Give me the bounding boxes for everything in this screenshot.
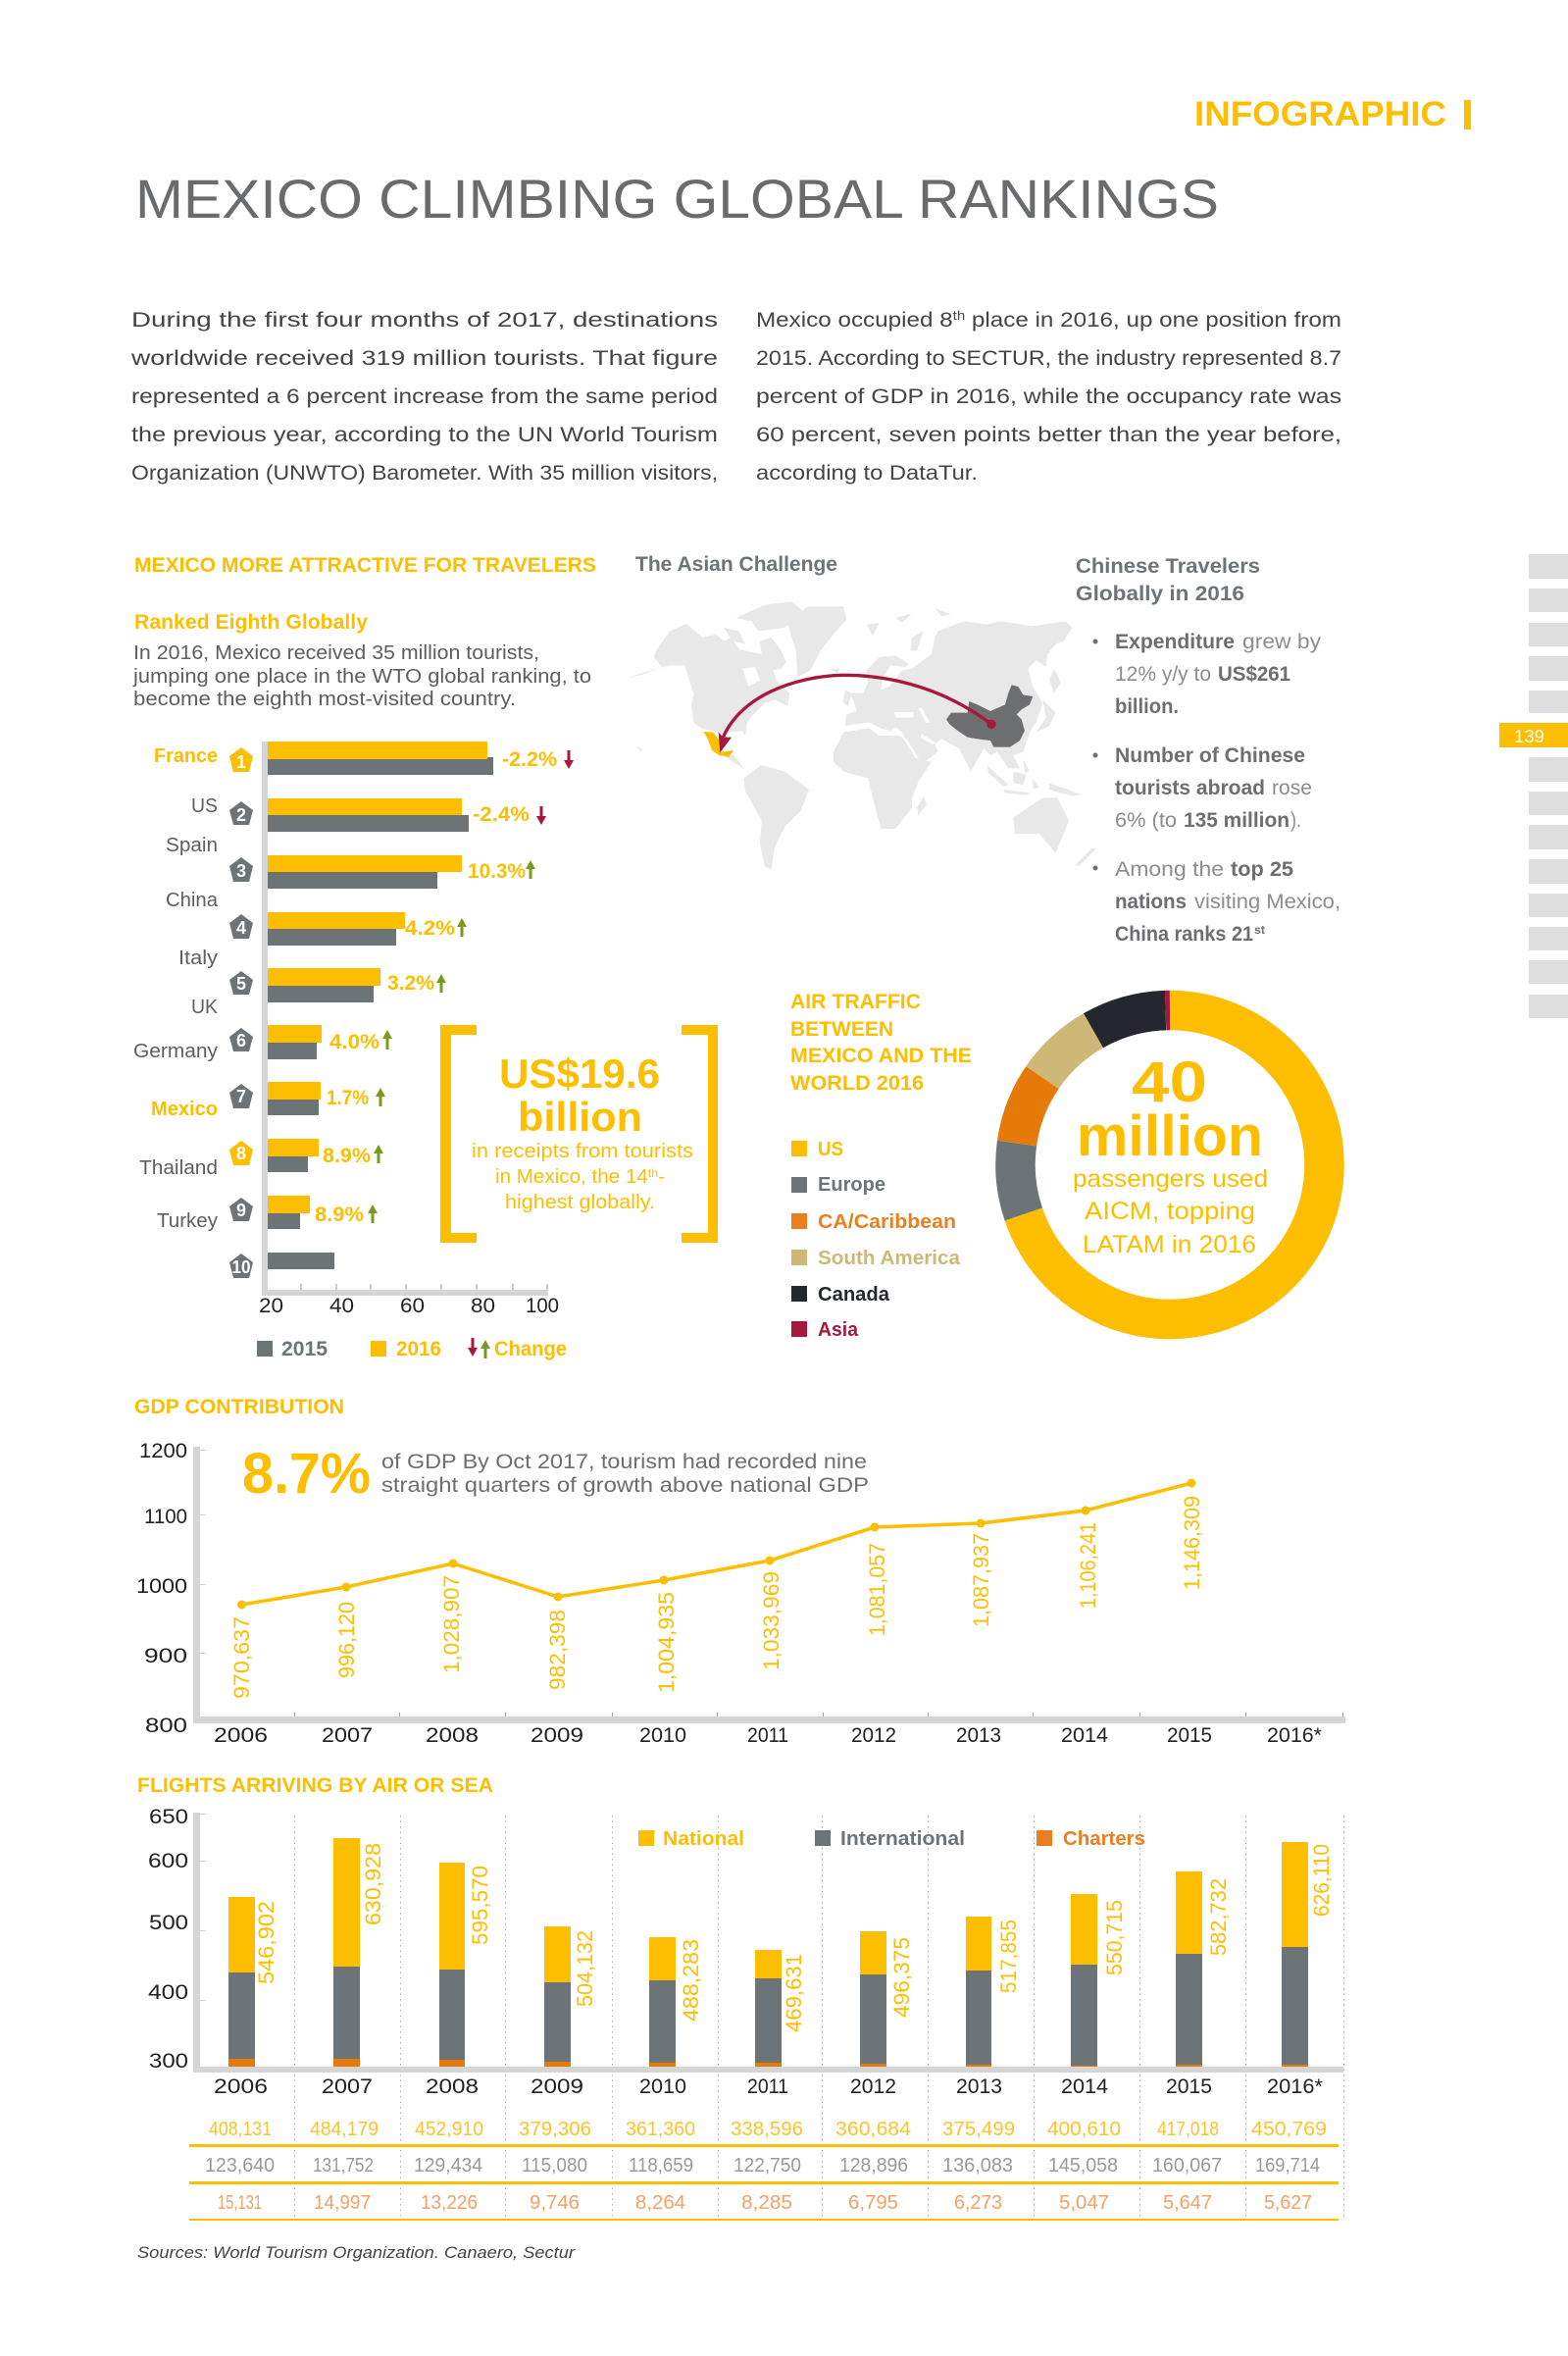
data table: international row: 145,058 <box>1048 2155 1118 2177</box>
change percentages <box>315 748 557 1226</box>
bullet: number of tourists: 135 million <box>1184 809 1290 832</box>
intro text: right column: 2015. According to SECTUR, the industry represented 8.7 <box>756 347 1341 370</box>
data table: international row: 118,659 <box>629 2155 693 2177</box>
rotated totals: 488,283 <box>679 1939 703 2022</box>
rotated totals: 582,732 <box>1206 1878 1231 1956</box>
callout: US$19.6 billion: billion <box>518 1094 642 1140</box>
country labels: Thailand <box>139 1157 218 1179</box>
rotated totals: 550,715 <box>1102 1900 1127 1975</box>
year labels: 2007 <box>322 2075 373 2098</box>
x axis ticks <box>294 1713 1343 1716</box>
callout: US$19.6 billion: US$19.6 <box>499 1050 660 1097</box>
callout: US$19.6 billion: th <box>648 1166 658 1180</box>
country labels <box>133 745 219 1232</box>
x axis labels: 2010 <box>639 1724 686 1747</box>
year labels: 2015 <box>1166 2075 1212 2098</box>
callout: 8.7% of GDP <box>242 1442 869 1506</box>
ranking description: jumping one place in the WTO global ranking, to <box>132 666 591 688</box>
donut centre text: AICM, topping <box>1085 1198 1255 1225</box>
rotated totals: 469,631 <box>782 1954 806 2032</box>
legend: flights: International <box>840 1828 965 1850</box>
y axis labels: 300 <box>149 2050 188 2073</box>
year labels: 2008 <box>426 2075 479 2098</box>
rotated values: 1,028,907 <box>439 1575 464 1673</box>
donut centre text: million <box>1077 1104 1263 1168</box>
axis labels: 80 <box>471 1295 495 1317</box>
year labels <box>214 2075 1323 2098</box>
legend: flights: Charters <box>1063 1828 1145 1850</box>
data table: national row: 408,131 <box>209 2119 272 2140</box>
stacked bar chart: flights <box>148 1806 1343 2220</box>
intro text: right column: 60 percent, seven points better than the year before, <box>756 424 1341 446</box>
national bars <box>228 1838 1308 1982</box>
data table: national row: 360,684 <box>835 2119 911 2140</box>
bullet: number of tourists: Number of Chinese <box>1115 744 1305 767</box>
heading: The Asian Challenge: The Asian Challenge <box>635 553 837 576</box>
intro text: left column: worldwide received 319 million tourists. That figure <box>130 347 718 370</box>
rotated values: 1,081,057 <box>865 1543 889 1636</box>
legend: air traffic regions: CA/Caribbean <box>818 1211 956 1233</box>
data table: charters row: 5,047 <box>1059 2192 1109 2214</box>
panel heading <box>1076 555 1260 605</box>
data table: international row: 123,640 <box>205 2155 275 2177</box>
heading: flights arriving: FLIGHTS ARRIVING BY AIR OR SEA <box>137 1774 493 1797</box>
data table: charters row: 9,746 <box>530 2192 580 2214</box>
x axis labels: 2014 <box>1061 1724 1108 1747</box>
rotated totals: 595,570 <box>468 1866 492 1945</box>
change percentages: -2.2% <box>502 748 557 771</box>
data table: international row: 122,750 <box>733 2155 801 2177</box>
legend: air traffic regions: Canada <box>818 1284 890 1306</box>
rank badges <box>229 747 253 1278</box>
donut centre text: LATAM in 2016 <box>1083 1231 1256 1258</box>
callout: US$19.6 billion: - <box>658 1166 665 1188</box>
page tabs <box>1529 554 1568 1018</box>
rotated totals: 546,902 <box>254 1901 278 1984</box>
rotated values: 1,033,969 <box>759 1571 784 1670</box>
bullet: number of tourists: 6% (to <box>1115 809 1177 832</box>
bars 2015 <box>268 757 493 1269</box>
year labels: 2016* <box>1267 2075 1323 2098</box>
y axis labels <box>136 1440 187 1737</box>
intro text: right column: th <box>953 308 965 323</box>
change percentages: 3.2% <box>387 972 434 995</box>
x axis labels: 2009 <box>531 1724 583 1747</box>
data table: national row: 338,596 <box>731 2119 803 2140</box>
axis labels <box>259 1295 559 1317</box>
callout: US$19.6 billion: in Mexico, the 14 <box>495 1166 643 1188</box>
rank badges: 2 <box>236 805 246 825</box>
rank badges: 5 <box>236 974 246 994</box>
China highlighted <box>946 685 1033 747</box>
intro text: right column: place in 2016, up one position from <box>965 309 1341 332</box>
bullet: expenditure: Expenditure <box>1115 631 1235 653</box>
legend: flights <box>638 1828 1145 1850</box>
change percentages: 8.9% <box>323 1145 371 1167</box>
data table: international row: 129,434 <box>414 2155 482 2177</box>
country labels: China <box>166 890 219 911</box>
y axis labels: 500 <box>149 1912 188 1934</box>
rank badges: 1 <box>236 752 246 772</box>
data table: charters row: 15,131 <box>218 2192 262 2214</box>
axes <box>193 1447 1345 1723</box>
year labels: 2013 <box>956 2075 1002 2098</box>
rank badges: 4 <box>236 918 246 938</box>
data table: national row <box>209 2119 1327 2140</box>
donut chart: passengers by region <box>1015 1010 1324 1319</box>
legend: air traffic regions <box>791 1139 961 1341</box>
subheading: Ranked Eighth Globally: Ranked Eighth Globally <box>134 611 368 634</box>
axes <box>193 1813 1343 2073</box>
y axis labels: 400 <box>148 1981 188 2004</box>
country labels: UK <box>191 997 219 1018</box>
donut centre text: 40 <box>1132 1050 1207 1114</box>
bullet: China rank: visiting Mexico, <box>1194 891 1340 913</box>
intro text: left column: During the first four months of 2017, destinations <box>131 309 718 332</box>
bar chart: top ten destinations <box>133 742 574 1317</box>
bullet: China rank: China ranks 21 <box>1115 923 1253 946</box>
change percentages: 10.3% <box>468 860 526 883</box>
data table: charters row: 8,264 <box>635 2192 685 2214</box>
y axis labels: 800 <box>145 1715 187 1737</box>
x axis labels <box>214 1724 1322 1747</box>
data table: charters row: 6,795 <box>848 2192 898 2214</box>
callout: 8.7% of GDP: straight quarters of growth above national GDP <box>381 1474 869 1497</box>
bullet: expenditure <box>1092 631 1322 718</box>
data table: national row: 400,610 <box>1047 2119 1121 2140</box>
bullet: expenditure: US$261 <box>1218 663 1290 686</box>
sources note: Sources: World Tourism Organization. Canaero, Sectur <box>137 2243 576 2262</box>
data table: charters row: 13,226 <box>421 2192 478 2214</box>
rotated totals: 630,928 <box>361 1843 385 1925</box>
bullet: China rank <box>1092 858 1340 946</box>
data table: national row: 452,910 <box>415 2119 483 2140</box>
year labels: 2014 <box>1061 2075 1108 2098</box>
heading: GDP contribution: GDP CONTRIBUTION <box>134 1396 344 1418</box>
rank badges: 6 <box>236 1031 246 1050</box>
y axis labels: 1200 <box>139 1440 187 1462</box>
data table: charters row: 5,647 <box>1163 2192 1212 2214</box>
rank badges: 3 <box>236 861 246 881</box>
heading: Air traffic: MEXICO AND THE <box>790 1045 972 1067</box>
y axis labels <box>148 1806 188 2073</box>
data table: international row: 136,083 <box>942 2155 1013 2177</box>
country labels: Turkey <box>157 1210 218 1232</box>
country labels: Italy <box>178 948 218 969</box>
data table: international row: 115,080 <box>522 2155 587 2177</box>
y axis labels: 1000 <box>136 1575 187 1598</box>
data table: charters row: 6,273 <box>954 2192 1002 2214</box>
rotated totals: 496,375 <box>889 1937 914 2018</box>
bullet: China rank: st <box>1254 923 1265 937</box>
page number <box>1499 723 1568 747</box>
heading: Air traffic <box>790 991 972 1095</box>
change percentages: 1.7% <box>327 1087 369 1109</box>
x axis labels: 2008 <box>426 1724 479 1747</box>
intro text: right column <box>756 308 1341 485</box>
panel: Chinese travelers <box>1076 555 1340 946</box>
international bars <box>228 1947 1308 2066</box>
intro text: right column: Mexico occupied 8 <box>756 309 927 332</box>
change percentages: 4.2% <box>405 917 455 940</box>
data table: national row: 361,360 <box>626 2119 695 2140</box>
chart legend: 2015, 2016, change: Change <box>494 1338 567 1360</box>
continents <box>626 601 1096 871</box>
donut centre text <box>1073 1050 1268 1258</box>
intro text: left column: represented a 6 percent increase from the same period <box>131 385 718 408</box>
legend: air traffic regions: South America <box>818 1248 961 1269</box>
rank badges: 7 <box>236 1087 246 1106</box>
rank badges: 8 <box>236 1144 246 1163</box>
bullet: number of tourists: rose <box>1272 777 1312 799</box>
data table: international row: 128,896 <box>839 2155 908 2177</box>
title: MEXICO CLIMBING GLOBAL RANKINGS <box>135 168 1219 230</box>
dotted gridlines <box>294 1816 1343 2220</box>
rotated values: 982,398 <box>545 1610 570 1690</box>
data table: international row <box>205 2155 1320 2177</box>
y axis labels: 650 <box>149 1806 188 1828</box>
map: world with route from China to Mexico <box>626 601 1096 871</box>
data table: national row: 484,179 <box>310 2119 379 2140</box>
legend: air traffic regions: Europe <box>818 1174 885 1196</box>
data table: international row: 169,714 <box>1255 2155 1320 2177</box>
change percentages: -2.4% <box>473 803 530 826</box>
data table: national row: 375,499 <box>942 2119 1015 2140</box>
bullet: expenditure: grew by <box>1242 631 1322 653</box>
data table: charters row <box>218 2192 1312 2214</box>
callout: US$19.6 billion <box>440 1025 718 1243</box>
bullet: number of tourists <box>1092 744 1312 832</box>
heading: Air traffic: BETWEEN <box>790 1018 893 1041</box>
country labels: Mexico <box>151 1099 218 1120</box>
axis labels: 60 <box>400 1295 425 1317</box>
x axis labels: 2007 <box>322 1724 373 1747</box>
country labels: France <box>154 745 218 767</box>
x axis labels: 2012 <box>851 1724 896 1747</box>
callout: US$19.6 billion: highest globally. <box>505 1192 655 1213</box>
axis labels: 40 <box>329 1295 354 1317</box>
rotated values: 1,087,937 <box>969 1533 993 1627</box>
bullet: China rank: nations <box>1115 891 1187 913</box>
bullet: expenditure: 12% y/y to <box>1115 663 1211 686</box>
right bracket <box>682 1025 718 1243</box>
chart legend: 2015, 2016, change: 2015 <box>281 1338 328 1360</box>
legend: flights: National <box>663 1828 744 1850</box>
rotated totals <box>254 1843 1334 2032</box>
y axis labels: 600 <box>148 1850 188 1872</box>
chart legend: 2015, 2016, change: 2016 <box>396 1338 441 1360</box>
year labels: 2006 <box>214 2075 268 2098</box>
rotated values: 1,106,241 <box>1076 1522 1100 1609</box>
country labels: US <box>191 795 218 817</box>
data table: international row: 131,752 <box>313 2155 374 2177</box>
legend: air traffic regions: US <box>818 1139 843 1160</box>
heading: Mexico more attractive: MEXICO MORE ATTRACTIVE FOR TRAVELERS <box>134 554 596 577</box>
bullet: China rank: top 25 <box>1231 858 1293 881</box>
callout: 8.7% of GDP: of GDP By Oct 2017, tourism had recorded nine <box>381 1451 867 1473</box>
change arrows <box>368 750 574 1223</box>
data table: charters row: 8,285 <box>741 2192 792 2214</box>
data table: international row: 160,067 <box>1152 2155 1222 2177</box>
x axis labels: 2015 <box>1167 1724 1212 1747</box>
panel heading: Chinese Travelers <box>1076 555 1260 578</box>
data table: charters row: 14,997 <box>314 2192 371 2214</box>
heading: Air traffic: WORLD 2016 <box>790 1072 924 1095</box>
ranking description: become the eighth most-visited country. <box>133 689 516 710</box>
intro text: left column <box>130 309 718 485</box>
data table: national row: 379,306 <box>519 2119 591 2140</box>
country labels: Germany <box>133 1041 218 1062</box>
x axis labels: 2011 <box>747 1724 788 1747</box>
rotated values: 996,120 <box>334 1602 359 1678</box>
callout: 8.7% of GDP: 8.7% <box>242 1442 371 1506</box>
year labels: 2011 <box>747 2075 788 2098</box>
rank badges: 10 <box>231 1257 251 1277</box>
x axis labels: 2016* <box>1267 1724 1322 1747</box>
legend: air traffic regions: Asia <box>818 1319 859 1341</box>
intro text: right column: percent of GDP in 2016, while the occupancy rate was <box>756 385 1341 408</box>
inland seas <box>742 667 935 758</box>
route arrow <box>719 675 996 752</box>
rotated values: 970,637 <box>229 1616 254 1699</box>
rotated totals: 517,855 <box>996 1920 1021 1993</box>
charter bars <box>228 2059 1308 2067</box>
data table: national row: 417,018 <box>1157 2119 1219 2140</box>
panel heading: Globally in 2016 <box>1076 583 1244 605</box>
change percentages: 4.0% <box>329 1031 379 1053</box>
year labels: 2012 <box>850 2075 896 2098</box>
rotated totals: 626,110 <box>1309 1844 1334 1917</box>
axis labels: 20 <box>259 1295 283 1317</box>
heading: Air traffic: AIR TRAFFIC <box>790 991 921 1013</box>
rotated values <box>229 1496 1204 1699</box>
year labels: 2009 <box>531 2075 583 2098</box>
data table: charters row: 5,627 <box>1264 2192 1312 2214</box>
chart axes <box>262 742 548 1296</box>
y axis labels: 900 <box>144 1645 187 1667</box>
section tag: INFOGRAPHIC: INFOGRAPHIC <box>1194 95 1446 133</box>
line chart: GDP contribution <box>136 1440 1345 1747</box>
y axis labels: 1100 <box>144 1506 187 1528</box>
bars 2016 <box>268 742 487 1213</box>
intro text: left column: Organization (UNWTO) Barometer. With 35 million visitors, <box>131 462 718 485</box>
bullet: number of tourists: tourists abroad <box>1115 777 1265 799</box>
ranking description <box>132 642 591 710</box>
x axis labels: 2013 <box>956 1724 1001 1747</box>
bullet: China rank: Among the <box>1115 858 1224 881</box>
ranking description: In 2016, Mexico received 35 million tourists, <box>133 642 539 664</box>
donut centre text: passengers used <box>1073 1165 1268 1193</box>
x axis labels: 2006 <box>214 1724 268 1747</box>
rank badges: 9 <box>236 1201 246 1220</box>
Mexico highlighted <box>703 732 733 757</box>
rotated totals: 504,132 <box>573 1930 597 2007</box>
data table: national row: 450,769 <box>1251 2119 1327 2140</box>
left bracket <box>440 1025 477 1243</box>
data line <box>237 1479 1196 1609</box>
chart legend: 2015, 2016, change <box>257 1338 567 1360</box>
rotated values: 1,146,309 <box>1180 1496 1204 1590</box>
axis labels: 100 <box>526 1295 559 1317</box>
rotated values: 1,004,935 <box>654 1592 679 1693</box>
callout: US$19.6 billion: in receipts from tourists <box>472 1141 693 1162</box>
country labels: Spain <box>166 835 218 856</box>
bullet: expenditure: billion. <box>1115 695 1179 718</box>
year labels: 2010 <box>639 2075 686 2098</box>
page number: 139 <box>1514 727 1544 746</box>
intro text: right column: according to DataTur. <box>756 462 978 485</box>
bullet: number of tourists: ). <box>1290 809 1301 832</box>
change percentages: 8.9% <box>315 1204 364 1226</box>
intro text: left column: the previous year, according to the UN World Tourism <box>131 424 718 446</box>
